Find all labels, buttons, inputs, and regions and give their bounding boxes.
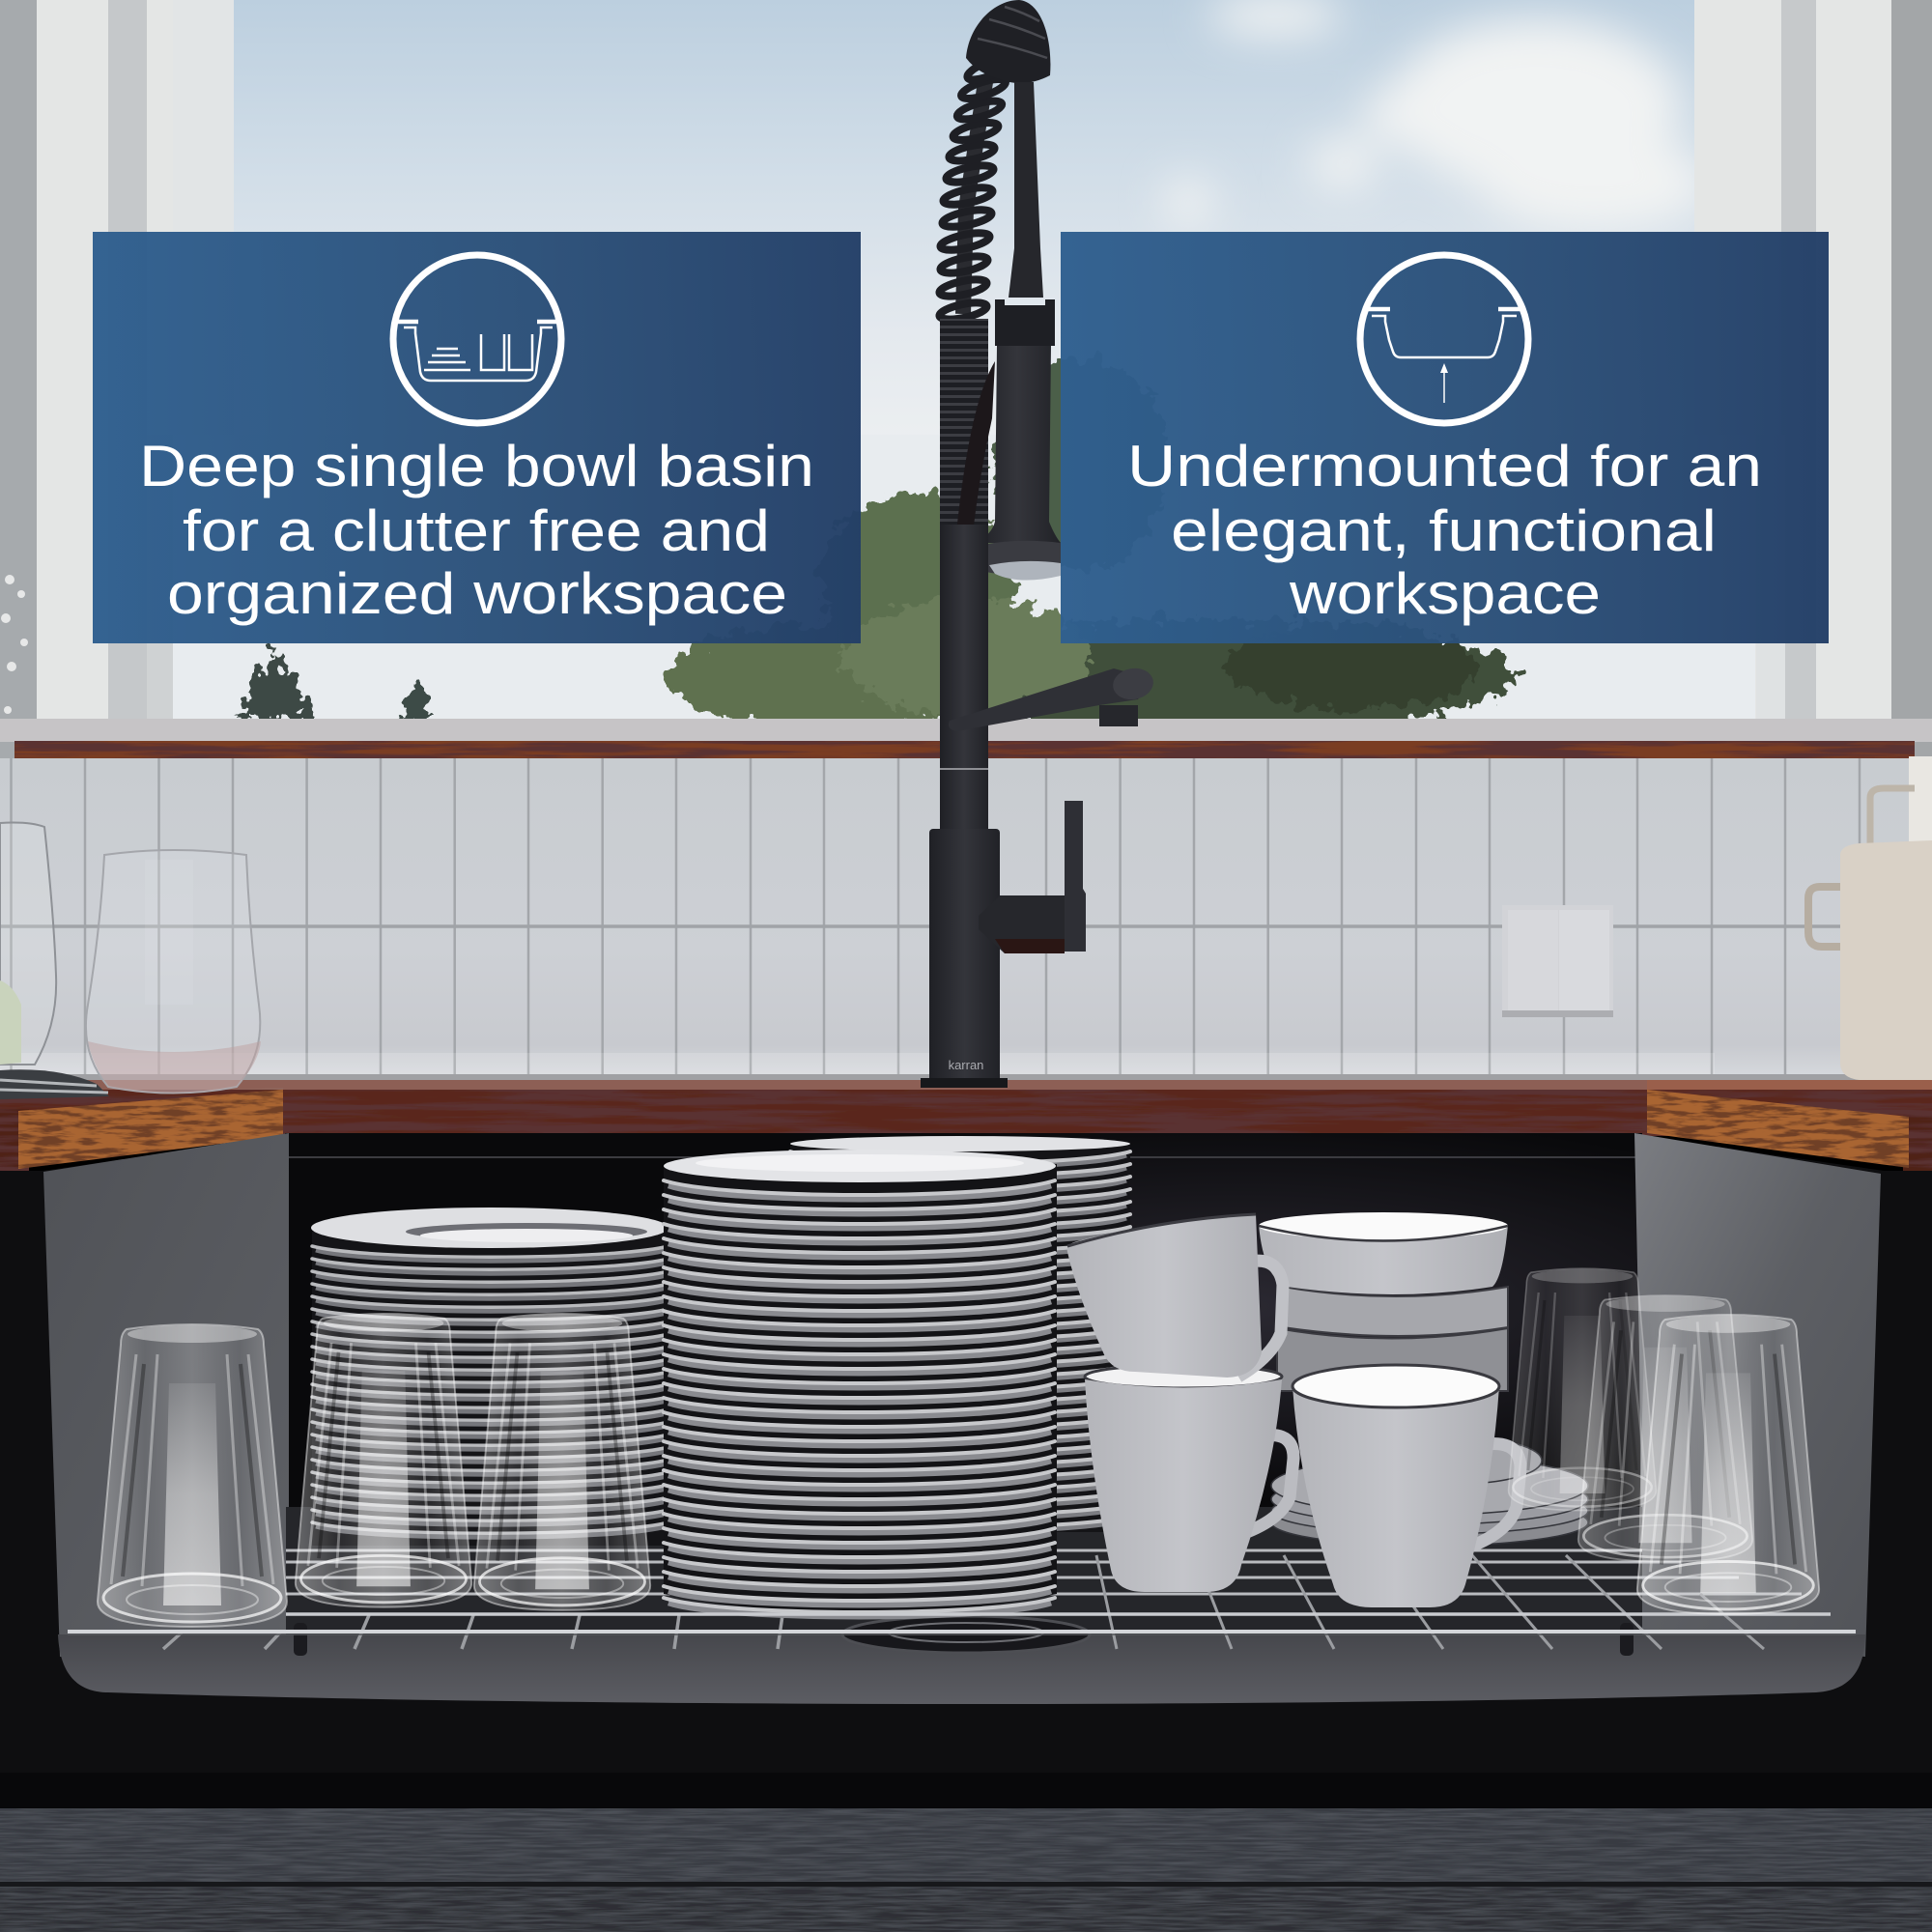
plant speckles at left edge xyxy=(1,575,28,714)
large front plate stack xyxy=(664,1150,1057,1616)
wood shelf xyxy=(14,741,1915,758)
spray face xyxy=(989,561,1061,581)
ribbed sleeve xyxy=(940,319,988,525)
left dark wood edge xyxy=(0,1109,29,1173)
wall switch plate xyxy=(1502,905,1613,1017)
flexible hose xyxy=(1009,82,1043,298)
heading text: Undermounted for an xyxy=(1127,434,1762,498)
cream pot and jug xyxy=(1808,756,1932,1080)
glass left third xyxy=(474,1314,650,1610)
icon: basin with dishes xyxy=(393,255,561,423)
panel: undermounted xyxy=(1061,232,1829,643)
folded cloth xyxy=(0,1069,109,1099)
right sink wall xyxy=(1634,1133,1881,1657)
sink body xyxy=(0,1133,1932,1773)
glass left front xyxy=(98,1324,287,1627)
wire rack front bars xyxy=(68,1614,1856,1634)
base body xyxy=(929,829,1000,1082)
panel background xyxy=(1061,232,1829,643)
stemless glass left xyxy=(0,823,261,1094)
heading text xyxy=(1127,434,1762,626)
left plate stack xyxy=(311,1208,668,1546)
dome ribs xyxy=(978,7,1047,58)
right countertop cut edge xyxy=(1647,1090,1909,1168)
spout arm xyxy=(949,668,1150,731)
sink front shadow xyxy=(0,1773,1932,1808)
base plate xyxy=(921,1078,1008,1088)
window background xyxy=(0,0,1932,763)
backsplash tiles xyxy=(0,758,1932,1080)
heading text xyxy=(139,434,814,626)
spring coil xyxy=(938,55,1009,323)
countertop surface xyxy=(0,1080,1932,1125)
right dark wood edge xyxy=(1903,1115,1932,1173)
spray head xyxy=(974,346,1061,543)
spout cap xyxy=(1111,666,1155,702)
lever handle xyxy=(1065,801,1086,952)
trees outside window xyxy=(237,357,1517,734)
wood counter front xyxy=(0,1090,1932,1136)
back plate stack xyxy=(790,1136,1130,1532)
mug front xyxy=(1293,1365,1520,1607)
stacked bowls xyxy=(1259,1212,1508,1391)
panel: deep single bowl xyxy=(93,232,861,643)
glass back right xyxy=(1578,1295,1752,1562)
logo: karran xyxy=(949,1058,983,1072)
window sill xyxy=(0,719,1932,742)
heading text: organized workspace xyxy=(167,561,787,626)
sink floor xyxy=(58,1507,1865,1704)
side plates xyxy=(1271,1437,1588,1546)
mug tilted on top xyxy=(1067,1214,1283,1378)
aerator xyxy=(1099,705,1138,726)
heading text: elegant, functional xyxy=(1171,498,1717,563)
icon: undermount basin with arrow xyxy=(1360,255,1528,423)
heading text: workspace xyxy=(1289,561,1601,626)
cabinet lower panel xyxy=(0,1882,1932,1932)
glass left middle xyxy=(296,1314,471,1607)
holder collar xyxy=(995,299,1055,346)
rack rubber feet xyxy=(294,1623,1634,1656)
clouds xyxy=(1165,0,1710,232)
faucet xyxy=(921,0,1155,1088)
lever arm shading xyxy=(995,939,1065,953)
panel background xyxy=(93,232,861,643)
upper column xyxy=(940,525,988,829)
column ring xyxy=(940,768,988,770)
coil dome xyxy=(966,0,1050,83)
left sink wall xyxy=(43,1133,289,1657)
spray flange xyxy=(973,541,1061,575)
heading text: for a clutter free and xyxy=(183,498,770,563)
lever arm xyxy=(979,895,1065,953)
heading text: Deep single bowl basin xyxy=(139,434,814,498)
glass front right xyxy=(1637,1315,1819,1614)
wire rack back bars and prongs xyxy=(163,1550,1802,1649)
left countertop cut edge xyxy=(18,1090,283,1169)
mug lower left xyxy=(1085,1365,1293,1592)
arrow head xyxy=(1440,363,1448,373)
spray head arc xyxy=(954,361,995,553)
glass back right dark xyxy=(1509,1268,1656,1511)
drain xyxy=(842,1616,1090,1653)
cabinet front grain xyxy=(0,1808,1932,1882)
